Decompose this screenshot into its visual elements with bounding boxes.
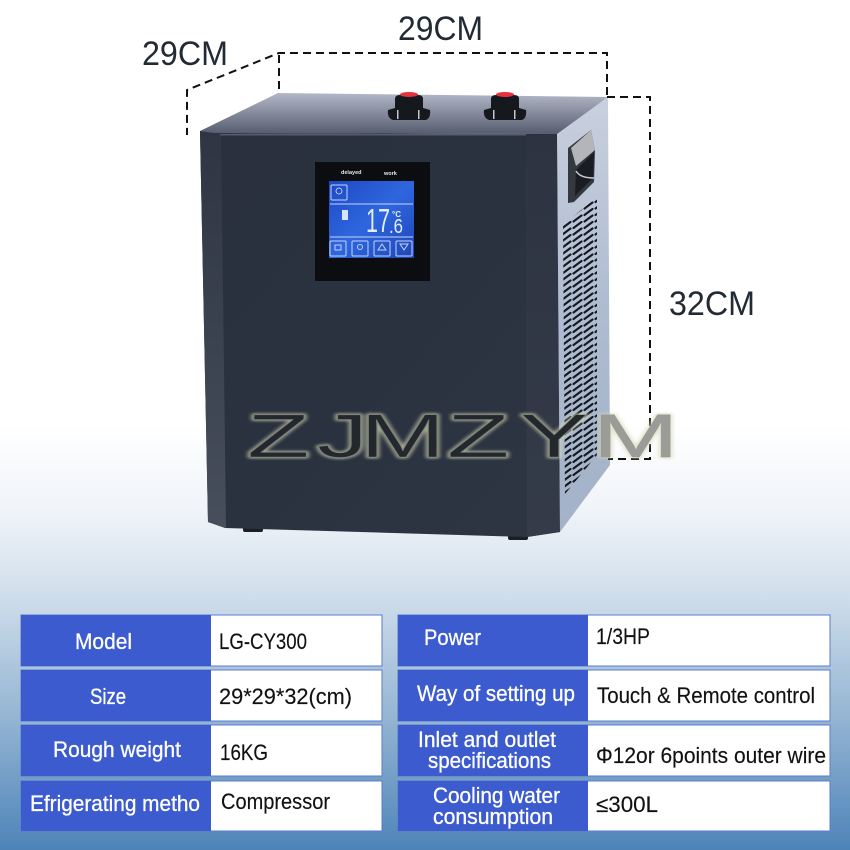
row: model: LG-CY300 — [219, 629, 307, 654]
row: rough weight: 16KG — [220, 740, 268, 765]
row: way of setting up: Way of setting up — [417, 681, 575, 706]
LCD screen: 17 — [366, 202, 390, 239]
row: model — [21, 615, 382, 666]
spec table: right — [398, 615, 830, 831]
row: refrigerating method: Compressor — [221, 789, 330, 814]
row: inlet and outlet: specifications — [428, 748, 551, 773]
watermark: M — [593, 402, 678, 470]
row: model: Model — [75, 629, 132, 654]
dimension label: depth: 29CM — [142, 35, 228, 73]
row: rough weight: Rough weight — [53, 737, 181, 762]
dimension label: height: 32CM — [669, 285, 755, 323]
row: cooling water: ≤300L — [596, 792, 658, 817]
row: power — [398, 615, 830, 666]
dimension lines — [187, 53, 650, 459]
watermark: M — [593, 402, 678, 470]
LCD screen: .6 — [389, 216, 403, 238]
row: size — [21, 670, 382, 721]
row: way of setting up: Touch & Remote control — [597, 683, 815, 708]
row: size: 29*29*32(cm) — [219, 684, 352, 709]
row: inlet and outlet: Inlet and outlet — [418, 727, 556, 752]
row: refrigerating method: Efrigerating metho — [30, 791, 200, 816]
watermark: ZJMZY — [247, 402, 588, 470]
top surface — [200, 93, 608, 134]
control panel — [315, 162, 430, 281]
row: refrigerating method — [21, 781, 382, 831]
row: inlet and outlet: Φ12or 6points outer wire — [596, 743, 826, 768]
row: rough weight — [21, 725, 382, 776]
row: cooling water: Cooling water — [433, 783, 560, 808]
side panel — [557, 97, 610, 532]
vent slots — [563, 200, 597, 494]
row: cooling water — [398, 781, 830, 831]
connector: right — [484, 92, 526, 120]
row: size: Size — [90, 684, 126, 709]
control panel: work — [383, 171, 398, 177]
front panel — [200, 131, 560, 537]
LCD screen: °C — [392, 210, 401, 219]
row: inlet and outlet — [398, 725, 830, 776]
row: power: 1/3HP — [596, 624, 650, 649]
connector: left — [388, 92, 430, 120]
row: way of setting up — [398, 670, 830, 721]
dimension label: width: 29CM — [398, 10, 483, 48]
feet — [243, 527, 528, 540]
row: power: Power — [424, 625, 481, 650]
control panel: delayed — [341, 170, 361, 176]
handle — [568, 130, 595, 203]
row: cooling water: consumption — [433, 804, 553, 829]
spec table: left — [21, 615, 382, 831]
chiller unit — [200, 93, 610, 540]
LCD screen — [329, 181, 414, 258]
watermark: ZJMZY — [247, 402, 588, 470]
front chamfer strips — [200, 131, 226, 528]
